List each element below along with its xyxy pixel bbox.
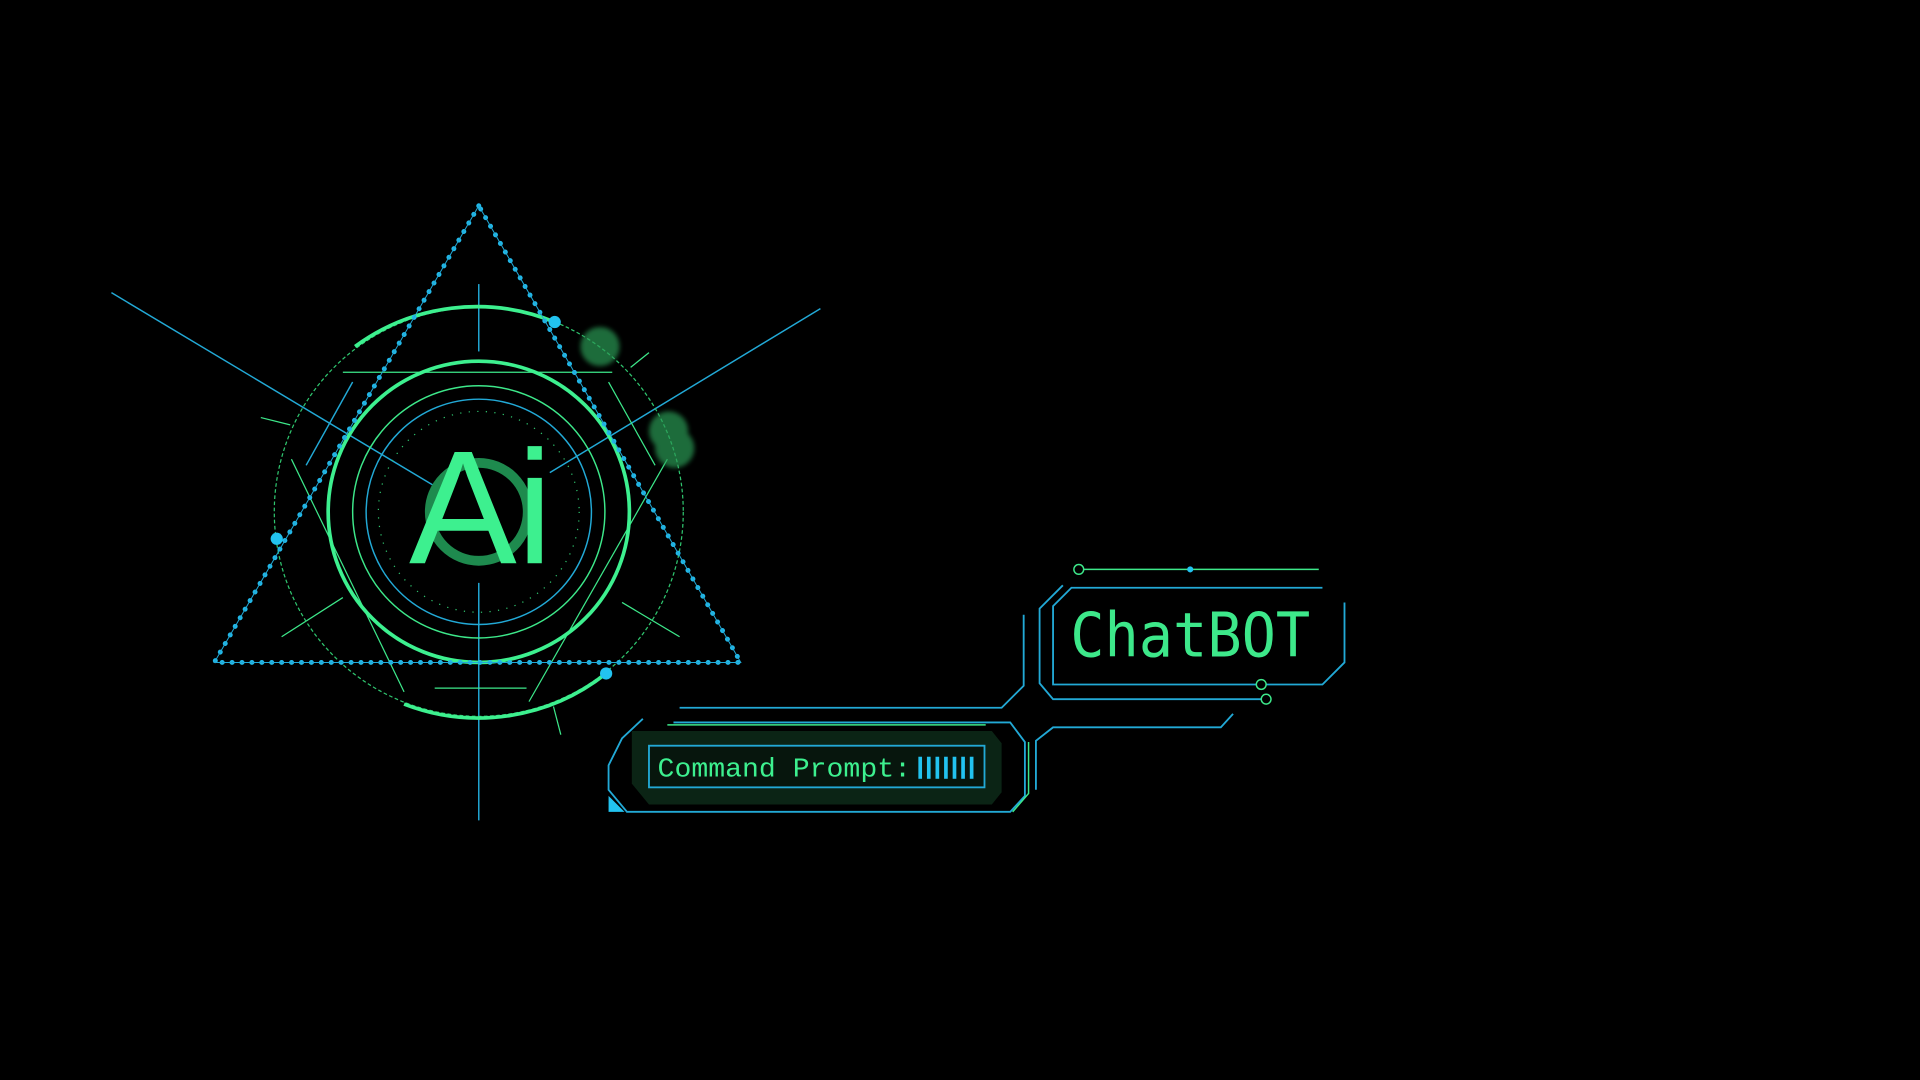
prompt text: Command Prompt:: [658, 755, 911, 785]
cursor bars: [918, 757, 973, 779]
panel: command prompt: [609, 719, 1029, 812]
triangle: [214, 206, 741, 662]
connector lines: [680, 615, 1233, 790]
emblem: AI: [111, 206, 820, 820]
cross lines: [111, 284, 820, 820]
green tick lines: [261, 353, 680, 735]
ring behind A: [430, 463, 528, 561]
blurred orbs: [580, 327, 694, 468]
cyan dots: [271, 316, 612, 680]
panel: ChatBOT: [1040, 564, 1344, 704]
rings: [274, 307, 683, 716]
ChatBOT title: ChatBOT: [1070, 600, 1310, 671]
Ai text: Ai: [409, 418, 553, 598]
